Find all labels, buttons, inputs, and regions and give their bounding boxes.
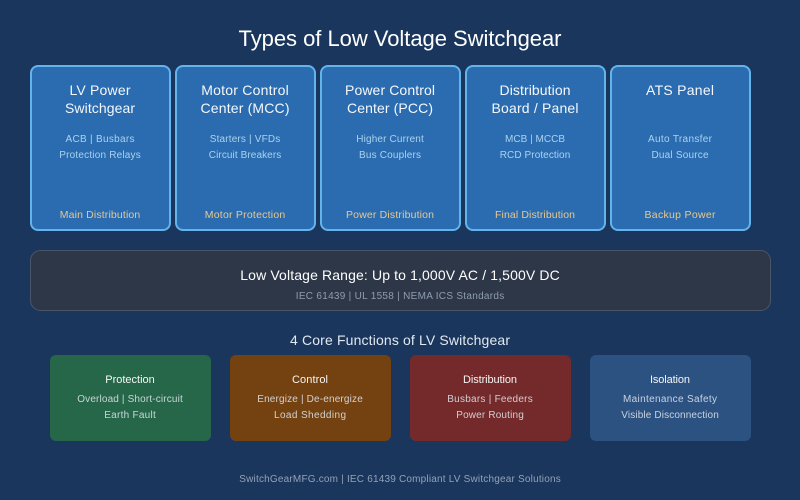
panel: ATS Panel [611, 66, 750, 230]
title: Types of Low Voltage Switchgear [238, 26, 562, 51]
panel: Isolation: Isolation [650, 374, 690, 386]
panel: Motor Control Center: Motor Control [201, 82, 289, 98]
panel: LV Power Switchgear: Protection Relays [59, 150, 141, 161]
panel: Isolation: Visible Disconnection [621, 410, 719, 421]
panel: voltage range: Low Voltage Range: Up to 1,000V AC / 1,500V DC [240, 267, 560, 283]
panel: LV Power Switchgear: Main Distribution [60, 209, 140, 221]
panel: ATS Panel: Backup Power [644, 209, 716, 221]
panel: LV Power Switchgear [31, 66, 170, 230]
panel: Distribution Board: MCB | MCCB [505, 134, 565, 145]
panel: Power Control Center: Power Distribution [346, 209, 434, 221]
panel: Motor Control Center: Motor Protection [205, 209, 285, 221]
heading: core functions: 4 Core Functions of LV Switchgear [290, 332, 510, 348]
panel: Distribution Board: Board / Panel [492, 100, 578, 116]
panel: Distribution Board: Final Distribution [495, 209, 575, 221]
panel: LV Power Switchgear: Switchgear [65, 100, 135, 116]
panel: LV Power Switchgear: LV Power [70, 82, 131, 98]
panel: Control: Load Shedding [274, 410, 346, 421]
panel: voltage range: IEC 61439 | UL 1558 | NEMA ICS Standards [296, 291, 504, 302]
panel: LV Power Switchgear: ACB | Busbars [66, 134, 134, 145]
footer: SwitchGearMFG.com | IEC 61439 Compliant LV Switchgear Solutions [239, 474, 561, 485]
panel: Distribution Board [466, 66, 605, 230]
panel: Motor Control Center: Starters | VFDs [210, 134, 280, 145]
panel: Protection: Earth Fault [104, 410, 156, 421]
panel: Protection: Overload | Short-circuit [77, 394, 183, 405]
panel: Power Control Center [321, 66, 460, 230]
panel: voltage range [30, 250, 770, 310]
panel: Control: Energize | De-energize [257, 394, 363, 405]
panel: Protection: Protection [105, 374, 155, 386]
panel: Motor Control Center: Circuit Breakers [209, 150, 281, 161]
panel: Power Control Center: Center (PCC) [347, 100, 433, 116]
panel: Distribution Board: Distribution [500, 82, 570, 98]
panel: Isolation: Maintenance Safety [623, 394, 717, 405]
panel: Power Control Center: Bus Couplers [359, 150, 421, 161]
panel: Isolation [590, 355, 751, 441]
panel: Distribution [410, 355, 571, 441]
panel: Motor Control Center [176, 66, 315, 230]
panel: Control: Control [292, 374, 328, 386]
panel: ATS Panel: Auto Transfer [648, 134, 713, 145]
panel: Distribution: Distribution [463, 374, 517, 386]
panel: Control [230, 355, 391, 441]
panel: ATS Panel: Dual Source [652, 150, 709, 161]
panel: Distribution Board: RCD Protection [500, 150, 570, 161]
panel: Distribution: Busbars | Feeders [447, 394, 533, 405]
panel: Power Control Center: Higher Current [356, 134, 424, 145]
panel: Motor Control Center: Center (MCC) [200, 100, 290, 116]
panel: Distribution: Power Routing [456, 410, 524, 421]
panel: Power Control Center: Power Control [345, 82, 435, 98]
panel: Protection [50, 355, 211, 441]
panel: ATS Panel: ATS Panel [646, 82, 714, 98]
